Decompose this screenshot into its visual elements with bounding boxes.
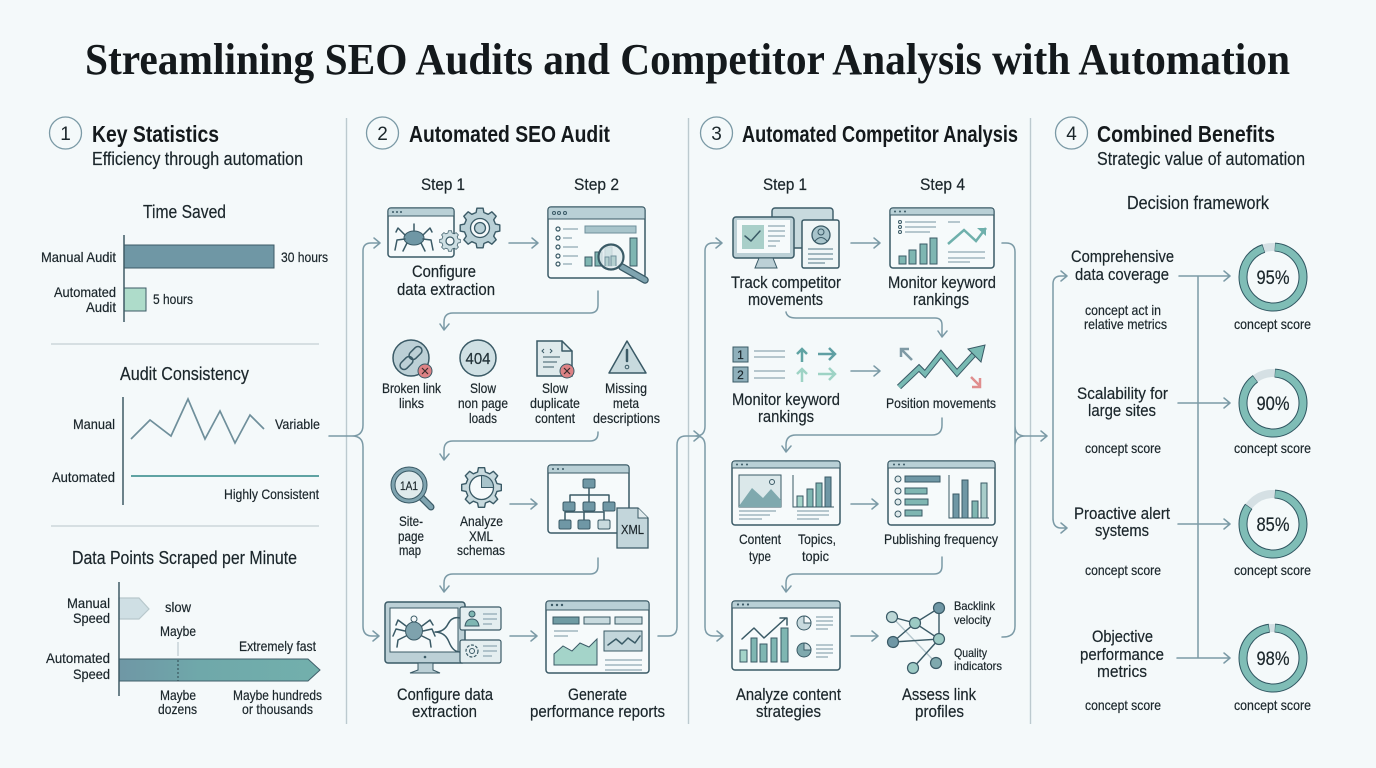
benefit: proactive alert systems [1074,505,1170,578]
arrow: step 1 to step 2 [509,238,538,248]
chart: audit consistency: Automated [52,469,115,485]
donut: 90%: concept score [1234,440,1311,456]
connectors: benefits to scores [1177,271,1230,663]
icon: duplicate content document [537,341,574,378]
label: site page map: map [399,542,421,558]
arrow: strategies to link profiles [851,631,878,641]
heading: automated competitor analysis [700,117,1018,149]
heading: key statistics: Efficiency through automation [92,149,303,169]
benefit: comprehensive data coverage: data coverage [1075,266,1169,284]
label: monitor keyword rankings: Monitor keyword [888,274,996,292]
label: analyze XML schemas: Analyze [460,513,503,529]
heading: automated competitor analysis: Automated Competitor Analysis [742,121,1018,147]
label: content type, topics [739,531,836,564]
benefit: comprehensive data coverage: concept act in [1085,302,1161,318]
icon: sitemap window with XML file: XML [621,522,644,537]
chart: data points scraped per minute: Speed [73,666,110,682]
label: missing meta descriptions: Missing [605,380,647,396]
chart: data points scraped per minute: Maybe [160,623,196,639]
icon: competitor monitors and profile [733,208,839,268]
benefit: proactive alert systems: Proactive alert [1074,505,1170,523]
title: Streamlining SEO Audits and Competitor Analysis with Automation [85,35,1290,84]
label: track competitor movements [731,274,841,309]
icon: publishing frequency window [888,461,995,525]
chart: audit consistency [52,364,320,505]
label: content type, topics: Content [739,531,781,547]
panel: key statistics [41,117,328,717]
label: configure data extraction: data extraction [397,281,495,299]
donut: 98%: 98% [1256,649,1290,670]
label: missing meta descriptions: descriptions [593,410,660,426]
heading: key statistics [50,117,303,169]
icon: sitemap window with XML file [548,465,648,548]
icon: content strategy window [732,601,840,670]
arrow: issues to sitemap [440,432,598,460]
icon: link network: Quality [954,646,987,660]
chart: audit consistency: Manual [73,416,115,432]
chart: audit consistency: Variable [275,416,320,432]
label: analyze content strategies [736,686,841,721]
label: slow duplicate content: content [535,410,575,426]
arrow: content to publishing [851,499,878,509]
donut: 85%: 85% [1256,515,1290,536]
chart: time saved: 5 hours [153,291,193,307]
label: site page map: Site- [399,513,423,529]
benefit: comprehensive data coverage [1071,248,1174,332]
benefit: objective performance metrics: Objective [1092,628,1153,646]
label: broken link links: links [399,395,424,411]
icon: position movement trend [899,345,985,387]
step labels: Step 1 [421,176,465,194]
label: slow duplicate content [530,380,580,426]
icon: link network [886,599,1002,674]
arrow: schema step [510,499,537,509]
label: configure data extraction: Configure [412,263,476,281]
label: monitor keyword rankings: rankings [758,408,814,426]
chart: data points scraped per minute: Speed [73,610,110,626]
heading: automated competitor analysis: 3 [711,124,722,145]
chart: data points scraped per minute: Automated [46,650,110,666]
chart: data points scraped per minute [46,548,322,717]
chart: data points scraped per minute: or thousands [242,701,313,717]
icon: monitor with spider [385,602,501,673]
benefit: objective performance metrics [1080,628,1164,713]
heading: automated SEO audit [366,117,610,149]
label: analyze content strategies: strategies [756,703,821,721]
heading: automated SEO audit: 2 [377,124,388,145]
benefit: comprehensive data coverage: Comprehensive [1071,248,1174,266]
heading: key statistics: 1 [60,124,71,145]
subheading: decision framework: Decision framework [1127,193,1270,213]
heading: combined benefits: Strategic value of automation [1097,149,1305,169]
label: analyze XML schemas: schemas [457,542,505,558]
label: analyze XML schemas: XML [469,528,493,544]
icon: link network: Backlink [954,599,996,613]
step labels: Step 4 [920,176,965,194]
arrow: publishing to strategies [782,557,942,592]
donut: 98% [1234,628,1311,713]
label: monitor keyword rankings: Monitor keyword [732,391,840,409]
chart: time saved: 30 hours [281,249,328,265]
icon: keyword rank list: 1 [737,348,744,362]
label: configure data extraction [397,686,494,721]
label: publishing frequency: Publishing frequency [884,531,998,547]
icon: performance report window [546,601,649,673]
label: site page map [398,513,424,558]
label: assess link profiles [902,686,977,721]
label: monitor keyword rankings [888,274,996,309]
chart: time saved: Audit [86,299,116,315]
chart: time saved: Manual Audit [41,249,116,265]
benefit: scalability for large sites [1077,385,1168,456]
chart: data points scraped per minute: Maybe hundreds [233,687,322,703]
label: analyze XML schemas [457,513,505,558]
label: broken link links: Broken link [382,380,442,396]
arrow: step 1 to step 4 [851,238,880,248]
arrow: audit into competitor analysis [658,238,723,641]
icon: warning triangle [609,341,646,373]
label: track competitor movements: Track competitor [731,274,841,292]
arrow: movements to content [782,418,942,452]
benefit: scalability for large sites: large sites [1088,402,1156,420]
icon: content type and topics window [732,461,840,525]
label: position movements: Position movements [886,395,996,411]
step labels [763,176,965,194]
heading: combined benefits: 4 [1066,124,1077,145]
donut: 85%: concept score [1234,562,1311,578]
benefit: objective performance metrics: metrics [1097,663,1147,681]
benefit: scalability for large sites: concept score [1085,440,1161,456]
benefit: proactive alert systems: concept score [1085,562,1161,578]
benefit: proactive alert systems: systems [1095,522,1149,540]
arrow: rankings to movements [851,366,880,376]
label: track competitor movements: movements [748,291,823,309]
icon: sitemap magnifier [391,467,431,507]
label: configure data extraction: extraction [412,703,477,721]
icon: link network: indicators [954,659,1002,673]
chart: data points scraped per minute: slow [165,599,192,615]
icon: gear with pie [462,468,501,507]
chart: data points scraped per minute: Maybe [160,687,196,703]
chart: audit consistency: Audit Consistency [120,364,249,384]
label: analyze content strategies: Analyze content [736,686,841,704]
label: generate performance reports [530,686,665,721]
icon: report with magnifier [548,207,645,280]
label: monitor keyword rankings [732,391,840,426]
step labels [421,176,619,194]
icon: keyword rank list [733,347,835,382]
label: assess link profiles: Assess link [902,686,977,704]
icon: broken link [393,340,432,378]
label: slow non page loads: non page [458,395,508,411]
donut: 85% [1234,494,1311,578]
panel: automated competitor analysis [700,117,1018,721]
arrow: competitor analysis into benefits [1002,243,1067,637]
label: configure data extraction [397,263,495,299]
label: content type, topics: Topics, [798,531,836,547]
donut: 90% [1234,373,1311,456]
arrow: extraction to reports [510,631,537,641]
label: broken link links [382,380,442,411]
chart: data points scraped per minute: dozens [158,701,197,717]
label: missing meta descriptions [593,380,660,426]
label: missing meta descriptions: meta [613,395,639,411]
icon: 404 [460,340,496,376]
chart: time saved: Automated [54,284,116,300]
label: generate performance reports: performance reports [530,703,665,721]
heading: combined benefits [1056,117,1305,169]
label: assess link profiles: profiles [915,703,964,721]
label: generate performance reports: Generate [568,686,627,704]
heading: automated SEO audit: Automated SEO Audit [409,121,610,147]
chart: audit consistency: Highly Consistent [224,486,319,502]
benefit: objective performance metrics: concept score [1085,697,1161,713]
benefit: comprehensive data coverage: relative metrics [1084,316,1167,332]
arrow: step 2 to issues [440,291,598,330]
chart: time saved: Time Saved [143,202,226,222]
chart: time saved [41,202,328,322]
donut: 95% [1234,247,1311,332]
icon: 404: 404 [466,351,491,368]
panel: combined benefits [1056,117,1311,713]
icon: crawler with gears [388,208,500,257]
icon: keyword rank list: 2 [737,368,744,382]
icon: keyword rankings window [890,208,994,268]
icon: link network: velocity [954,613,991,627]
step labels: Step 2 [574,176,619,194]
label: slow non page loads: Slow [470,380,497,396]
label: slow non page loads: loads [469,410,497,426]
heading: key statistics: Key Statistics [92,121,219,147]
label: slow duplicate content: Slow [542,380,569,396]
step labels: Step 1 [763,176,807,194]
chart: data points scraped per minute: Manual [67,595,110,611]
benefit: objective performance metrics: performance [1080,646,1164,664]
icon: sitemap magnifier: 1A1 [400,479,418,493]
label: slow non page loads [458,380,508,426]
label: slow duplicate content: duplicate [530,395,580,411]
chart: data points scraped per minute: Extremely fast [239,638,316,654]
arrow: statistics into SEO audit [329,238,380,641]
label: configure data extraction: Configure data [397,686,494,704]
arrow: to position movements [786,312,947,337]
donut: 90%: 90% [1256,394,1290,415]
chart: data points scraped per minute: Data Points Scraped per Minute [72,548,297,568]
label: content type, topics: topic [802,548,829,564]
panel: automated SEO audit [366,117,665,721]
heading: combined benefits: Combined Benefits [1097,121,1275,147]
benefit: scalability for large sites: Scalability for [1077,385,1168,403]
label: site page map: page [398,528,424,544]
donut: 98%: concept score [1234,697,1311,713]
donut: 95%: concept score [1234,316,1311,332]
arrow: schema to extraction [440,558,598,592]
donut: 95%: 95% [1256,268,1290,289]
label: monitor keyword rankings: rankings [913,291,969,309]
label: content type, topics: type [749,548,771,564]
